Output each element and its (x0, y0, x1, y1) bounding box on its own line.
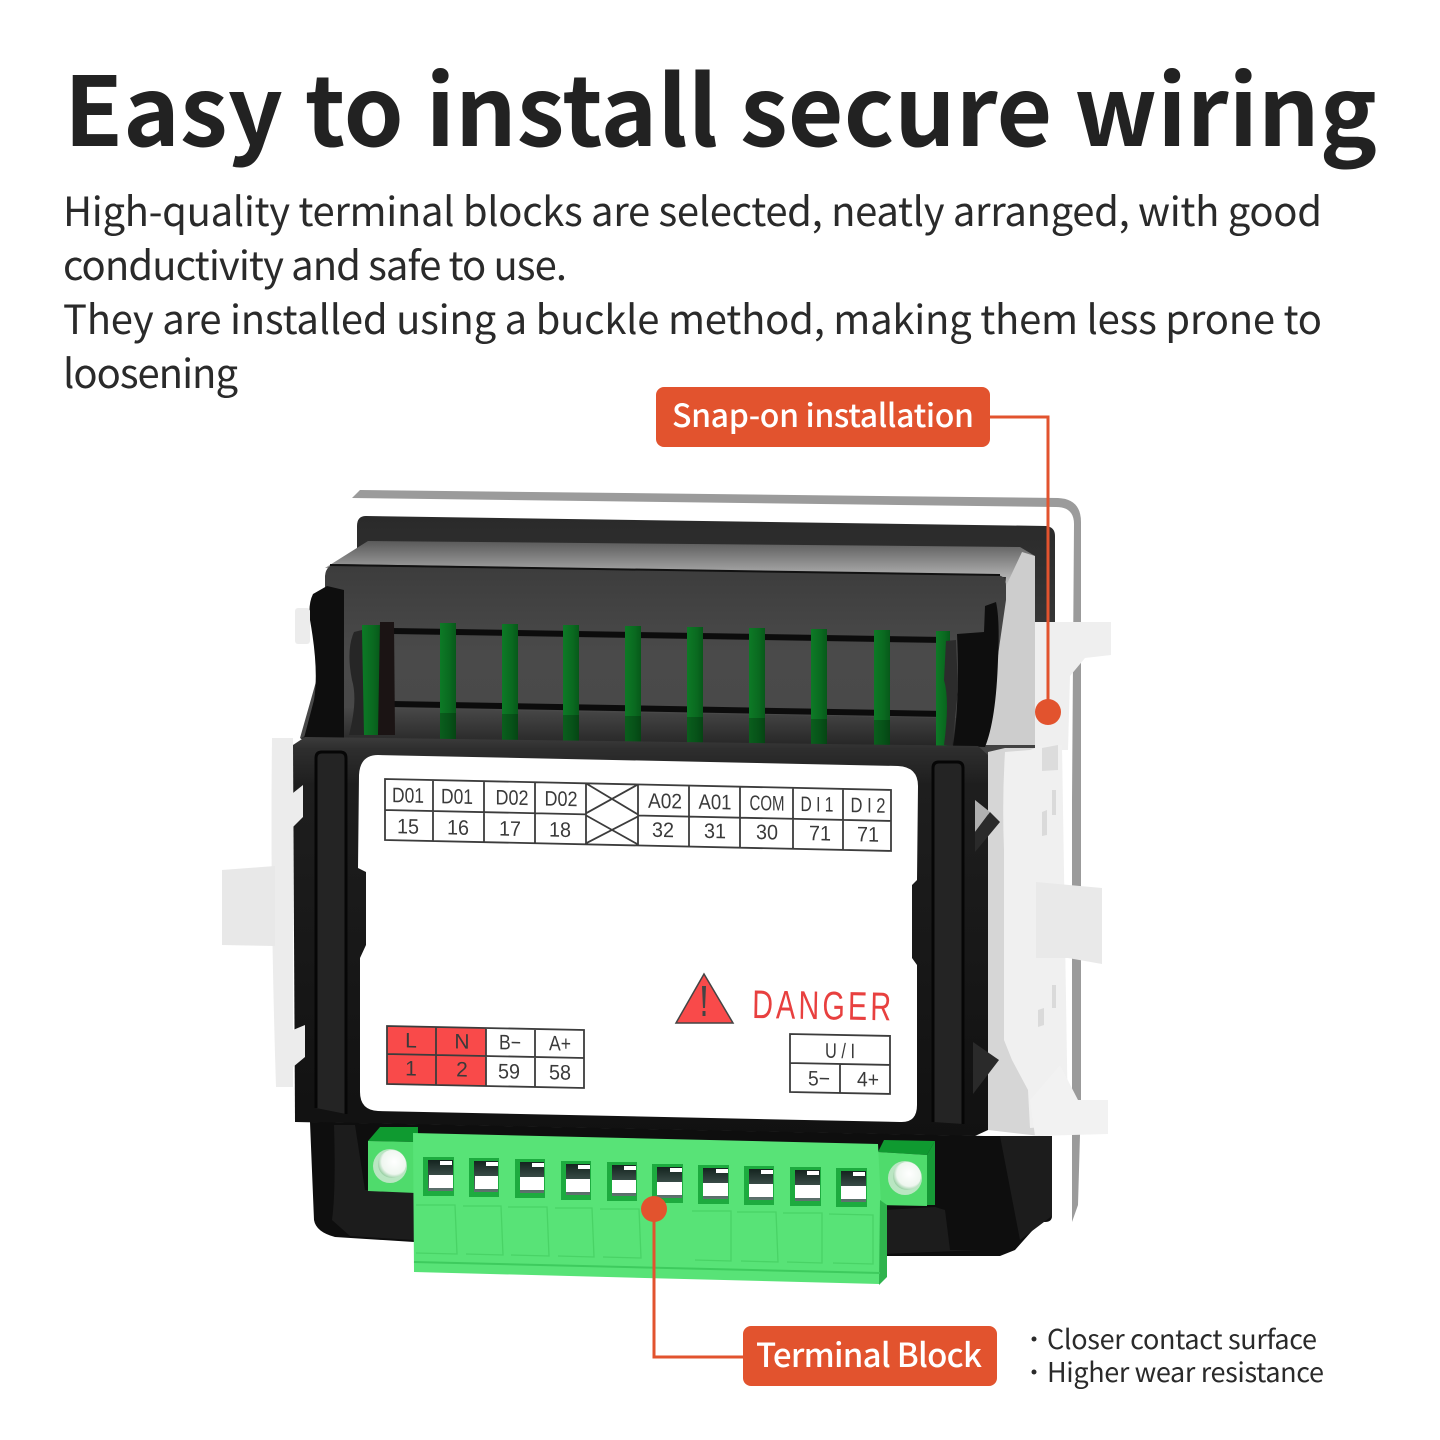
U/I table: 4+ (857, 1068, 879, 1092)
left white clip (222, 738, 293, 1087)
terminal block side face (879, 1200, 887, 1285)
U/I table (790, 1034, 890, 1094)
wiring table top: 15 (397, 815, 419, 839)
description text: conductivity and safe to use. (63, 234, 567, 292)
wiring table top: 32 (652, 819, 674, 842)
screw right (888, 1161, 922, 1195)
green terminal block body (413, 1133, 886, 1284)
wiring table top: D I 2 (850, 794, 885, 818)
power table bottom-left: 58 (549, 1061, 571, 1085)
wiring table top: 30 (756, 821, 778, 845)
green left ear (368, 1127, 418, 1193)
front body (293, 737, 988, 1136)
right groove (933, 762, 963, 1124)
wiring table top: D I 1 (800, 793, 834, 817)
right lower tab (1030, 1065, 1108, 1136)
right side clips (944, 602, 999, 747)
danger text: DANGER (752, 982, 892, 1030)
power table bottom-left: 59 (498, 1060, 520, 1084)
wiring table top: D02 (496, 786, 528, 810)
power table bottom-left: 2 (456, 1058, 468, 1082)
top edge line (330, 565, 1000, 575)
right light side of housing (985, 552, 1037, 745)
power table bottom-left (387, 1026, 584, 1088)
screw left (373, 1149, 407, 1183)
power table bottom-left: L (405, 1029, 417, 1053)
terminal block panels (416, 1205, 873, 1264)
U/I table: 5− (808, 1067, 830, 1091)
label plate (358, 755, 918, 1122)
description text (63, 180, 1322, 400)
power table bottom-left: B− (499, 1031, 521, 1055)
wiring table top: A02 (648, 790, 682, 813)
wiring table top: 71 (857, 823, 879, 847)
right white clip assembly (973, 745, 1108, 1136)
inner housing (300, 564, 1006, 745)
back dark panel (357, 516, 1055, 760)
wiring table top: D01 (392, 784, 424, 808)
wiring table top: 71 (809, 822, 831, 846)
callout: terminal block: Terminal Block (756, 1329, 982, 1377)
wiring table top (385, 779, 891, 851)
danger triangle icon (676, 974, 733, 1023)
bars shadow at floor (440, 713, 890, 748)
wiring table top: D02 (544, 787, 577, 811)
device: panel meter rear view (222, 490, 1111, 1285)
U/I table: U / I (825, 1040, 855, 1063)
description text: High-quality terminal blocks are selected, neatly arranged, with good (63, 180, 1322, 238)
terminal block lip line (414, 1262, 880, 1273)
callout: snap-on installation: Snap-on installation (672, 391, 974, 437)
lower black housing (310, 1122, 1052, 1256)
slots (392, 628, 945, 717)
left groove (316, 752, 346, 1114)
wiring table top: 18 (549, 819, 571, 842)
feature bullets: Higher wear resistance (1047, 1351, 1324, 1390)
sloped housing surface (325, 541, 1035, 640)
wiring table top: 16 (447, 816, 469, 840)
body notches (975, 800, 990, 832)
right top white clip (1035, 622, 1111, 750)
power table bottom-left: N (454, 1030, 470, 1054)
lower floor inside housing (300, 708, 985, 746)
callout: snap-on installation (656, 387, 1061, 725)
wiring table top: 31 (704, 820, 726, 843)
description text: loosening (63, 342, 238, 400)
title: Easy to install secure wiring (64, 35, 1377, 174)
description text: They are installed using a buckle method, making them less prone to (63, 288, 1322, 346)
feature bullets: Closer contact surface (1047, 1318, 1317, 1357)
power table bottom-left: A+ (549, 1032, 571, 1056)
callout: terminal block (641, 1196, 997, 1386)
dark rear slit (1035, 655, 1039, 747)
left tab stub (295, 608, 310, 644)
left clip teeth (293, 785, 305, 1067)
back frame: gray bezel (352, 490, 1081, 1222)
left side clips (304, 586, 364, 738)
green right ear (878, 1140, 935, 1206)
power table bottom-left: 1 (405, 1057, 417, 1081)
dark block left (378, 622, 395, 735)
wiring table top: 17 (499, 817, 521, 841)
wiring table top: A01 (698, 791, 732, 814)
lower housing highlight (332, 1125, 1052, 1254)
right middle tab (1036, 882, 1102, 964)
wiring table top: COM (750, 792, 784, 816)
terminal holes (423, 1157, 867, 1207)
wiring table top: D01 (441, 785, 473, 809)
green terminal bars (362, 623, 950, 748)
feature bullets (1032, 1318, 1324, 1390)
